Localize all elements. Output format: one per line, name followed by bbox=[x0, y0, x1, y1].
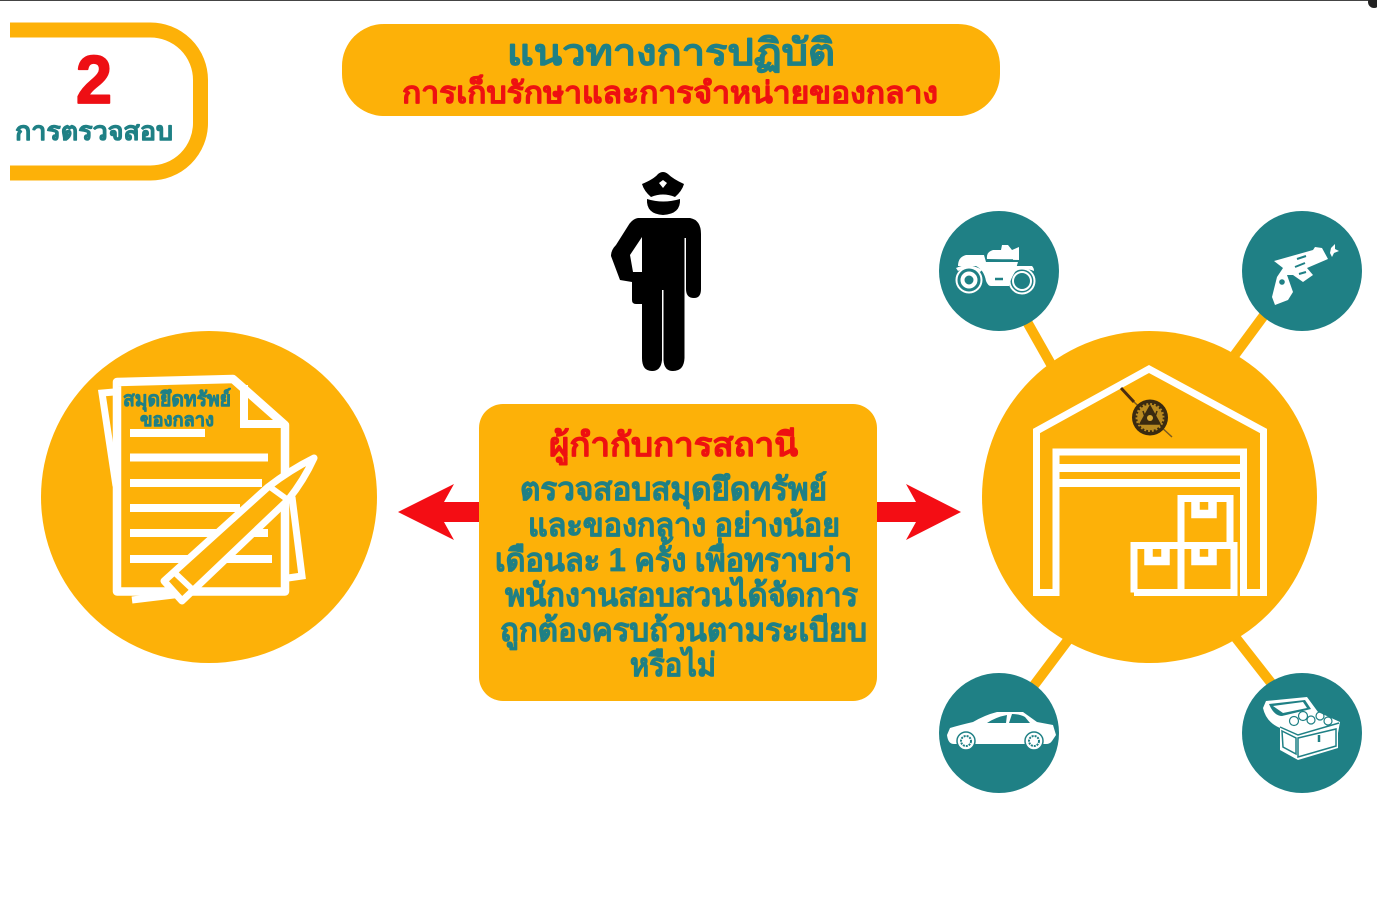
panel heading: ผู้กำกับการสถานี bbox=[549, 426, 798, 466]
panel body: เดือนละ 1 ครั้ง เพื่อทราบว่า bbox=[495, 536, 852, 578]
icon: revolver bbox=[1242, 211, 1362, 331]
panel body: ถูกต้องครบถ้วนตามระเบียบ bbox=[500, 612, 867, 651]
title banner bbox=[342, 24, 1000, 116]
subtitle: การเก็บรักษาและการจำหน่ายของกลาง bbox=[402, 74, 938, 110]
icon: police officer bbox=[611, 172, 701, 371]
panel: document circle bbox=[41, 331, 377, 663]
panel body: หรือไม่ bbox=[630, 646, 716, 683]
panel: evidence storehouse bbox=[982, 331, 1317, 663]
step number: 2 bbox=[76, 42, 112, 118]
step label: การตรวจสอบ bbox=[15, 116, 173, 146]
icon: treasure chest bbox=[1242, 673, 1362, 793]
step badge bbox=[10, 30, 200, 173]
panel body: และของกลาง อย่างน้อย bbox=[528, 507, 840, 543]
arrow: left bbox=[398, 484, 479, 540]
connector lines bbox=[1026, 314, 1272, 688]
panel: station superintendent bbox=[479, 404, 877, 701]
icon: warehouse bbox=[1036, 369, 1264, 592]
panel body bbox=[495, 471, 867, 683]
icon: notebook with pencil bbox=[102, 379, 314, 601]
icon: motorcycle bbox=[939, 211, 1059, 331]
title: แนวทางการปฏิบัติ bbox=[507, 32, 835, 73]
panel body: พนักงานสอบสวนได้จัดการ bbox=[505, 576, 858, 613]
notebook label: ของกลาง bbox=[140, 410, 214, 431]
arrow: right bbox=[877, 484, 961, 540]
icon: police seal bbox=[1121, 388, 1172, 437]
panel body: ตรวจสอบสมุดยึดทรัพย์ bbox=[520, 471, 827, 510]
icon: car bbox=[939, 673, 1059, 793]
notebook label: สมุดยึดทรัพย์ bbox=[123, 388, 231, 412]
notebook label bbox=[123, 388, 231, 431]
